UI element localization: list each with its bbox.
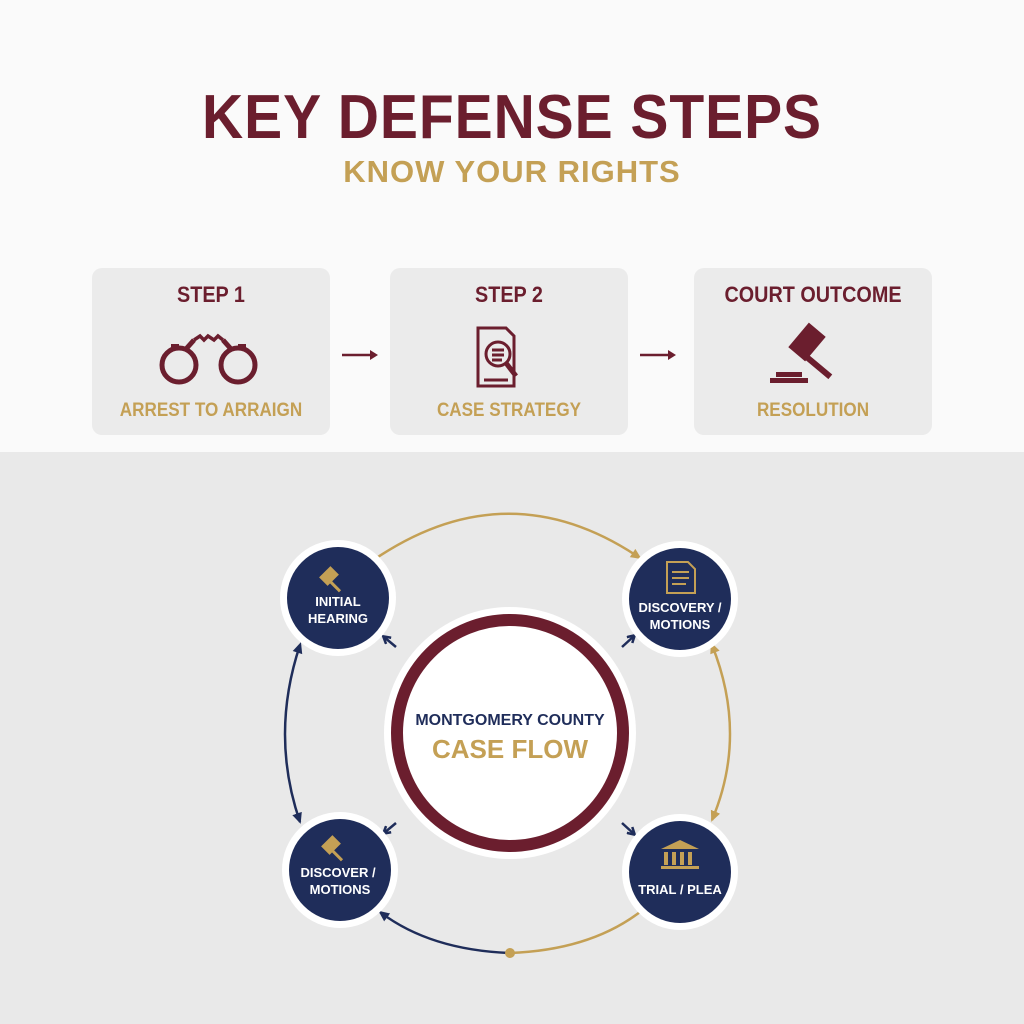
node: discovery / motions: MOTIONS bbox=[650, 617, 711, 632]
card: step 2: STEP 2 bbox=[475, 282, 543, 307]
node: trial / plea bbox=[622, 814, 738, 930]
card: court outcome: COURT OUTCOME bbox=[724, 282, 902, 307]
card: step 1: ARREST TO ARRAIGN bbox=[120, 400, 302, 421]
node: discovery / motions bbox=[622, 541, 738, 657]
diagram: case flow cycle bbox=[280, 512, 738, 958]
node: discovery / motions: DISCOVERY / bbox=[638, 600, 722, 615]
center circle: CASE FLOW bbox=[432, 734, 588, 764]
node: discover / motions: MOTIONS bbox=[310, 882, 371, 897]
node: initial hearing bbox=[280, 540, 396, 656]
icon: gavel bbox=[770, 322, 832, 383]
center circle bbox=[384, 607, 636, 859]
card: court outcome: RESOLUTION bbox=[757, 400, 869, 421]
icon: handcuffs bbox=[160, 334, 258, 384]
title: KEY DEFENSE STEPS bbox=[202, 83, 822, 152]
subtitle: KNOW YOUR RIGHTS bbox=[343, 154, 681, 189]
arrow bbox=[640, 350, 676, 360]
card: step 2 bbox=[390, 268, 628, 435]
arrow bbox=[342, 350, 378, 360]
node: trial / plea: TRIAL / PLEA bbox=[638, 882, 722, 897]
center circle: MONTGOMERY COUNTY bbox=[415, 712, 605, 729]
node: discover / motions bbox=[282, 812, 398, 928]
card: court outcome bbox=[694, 268, 932, 435]
card: step 2: CASE STRATEGY bbox=[437, 400, 581, 421]
icon: document search bbox=[476, 326, 518, 388]
node: initial hearing: INITIAL bbox=[315, 594, 361, 609]
arcs bbox=[285, 514, 730, 953]
small arrows bbox=[384, 636, 634, 834]
node: discover / motions: DISCOVER / bbox=[300, 865, 376, 880]
card: step 1: STEP 1 bbox=[177, 282, 245, 307]
card: step 1 bbox=[92, 268, 330, 435]
node: initial hearing: HEARING bbox=[308, 611, 368, 626]
